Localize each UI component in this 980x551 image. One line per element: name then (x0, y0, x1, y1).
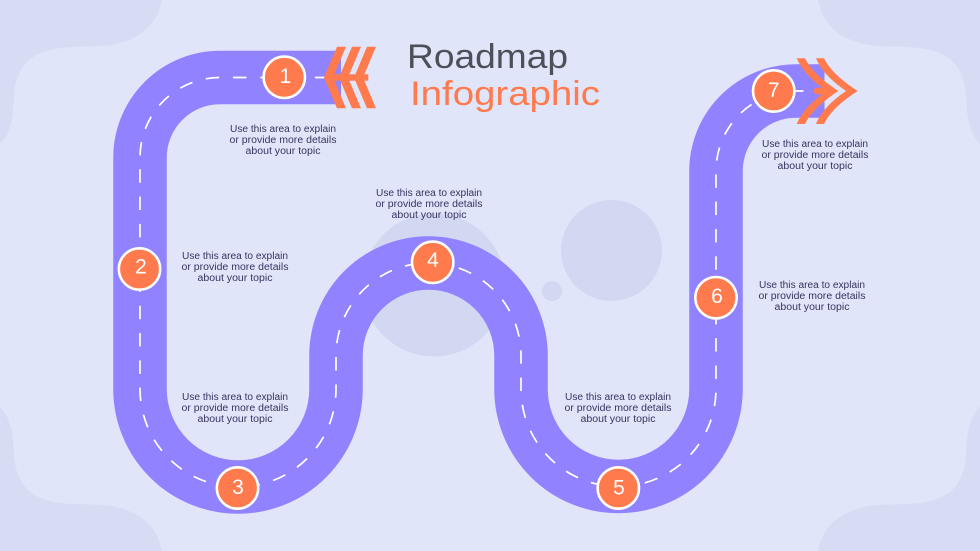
text block: step 5: about your topic (580, 414, 656, 425)
text block: step 1: Use this area to explain (230, 124, 336, 135)
background blob: top left (0, 0, 162, 144)
step marker 1: 1 (280, 65, 291, 88)
arrow head: right chevrons (797, 58, 858, 124)
decorative circle: right (561, 200, 662, 301)
step marker 6: 6 (711, 285, 723, 308)
title: Infographic (410, 75, 600, 113)
step marker 7 (753, 70, 794, 112)
text block: step 3: about your topic (198, 414, 272, 425)
text block: step 6: or provide more details (758, 291, 866, 302)
text block: step 7: or provide more details (762, 150, 868, 161)
text block: step 6: Use this area to explain (759, 280, 865, 291)
text block: step 3: or provide more details (182, 403, 288, 414)
background blob: bottom right (818, 407, 980, 551)
step marker 4: 4 (427, 249, 439, 272)
text block: step 1: or provide more details (230, 135, 336, 146)
step marker 4 (412, 242, 453, 283)
text block: step 3: Use this area to explain (182, 392, 288, 403)
text block: step 5: or provide more details (564, 403, 672, 414)
step marker 2: 2 (135, 256, 147, 278)
decorative circle: small (542, 281, 562, 301)
background blob: top right (818, 0, 980, 144)
step marker 5 (598, 467, 639, 509)
step marker 6 (695, 277, 737, 318)
text block: step 7 (762, 139, 868, 172)
step marker 2 (119, 248, 160, 290)
text block: step 4: Use this area to explain (376, 188, 482, 199)
step marker 7: 7 (768, 79, 780, 102)
text block: step 7: Use this area to explain (762, 139, 868, 150)
winding road (140, 78, 824, 487)
text block: step 1: about your topic (246, 146, 320, 157)
step marker 3: 3 (232, 476, 244, 499)
title: Roadmap (407, 38, 568, 76)
step marker 1 (264, 57, 305, 98)
text block: step 4 (376, 188, 482, 221)
text block: step 2 (182, 251, 288, 284)
text block: step 4: about your topic (392, 210, 466, 221)
step marker 5: 5 (613, 476, 625, 500)
text block: step 2: Use this area to explain (182, 251, 288, 262)
text block: step 5 (564, 392, 672, 425)
text block: step 1 (230, 124, 336, 157)
text block: step 6: about your topic (774, 302, 850, 313)
text block: step 6 (758, 280, 866, 313)
text block: step 2: about your topic (198, 273, 272, 284)
text block: step 7: about your topic (778, 161, 852, 172)
text block: step 2: or provide more details (182, 262, 288, 273)
background blob: bottom left (0, 407, 162, 551)
step marker 3 (217, 467, 258, 509)
arrow tail: left chevrons (324, 47, 376, 108)
text block: step 4: or provide more details (376, 199, 482, 210)
text block: step 5: Use this area to explain (565, 392, 671, 403)
road centre dashes (140, 78, 804, 487)
text block: step 3 (182, 392, 288, 425)
decorative circle: large behind step 4 (362, 214, 506, 356)
title (407, 38, 600, 113)
